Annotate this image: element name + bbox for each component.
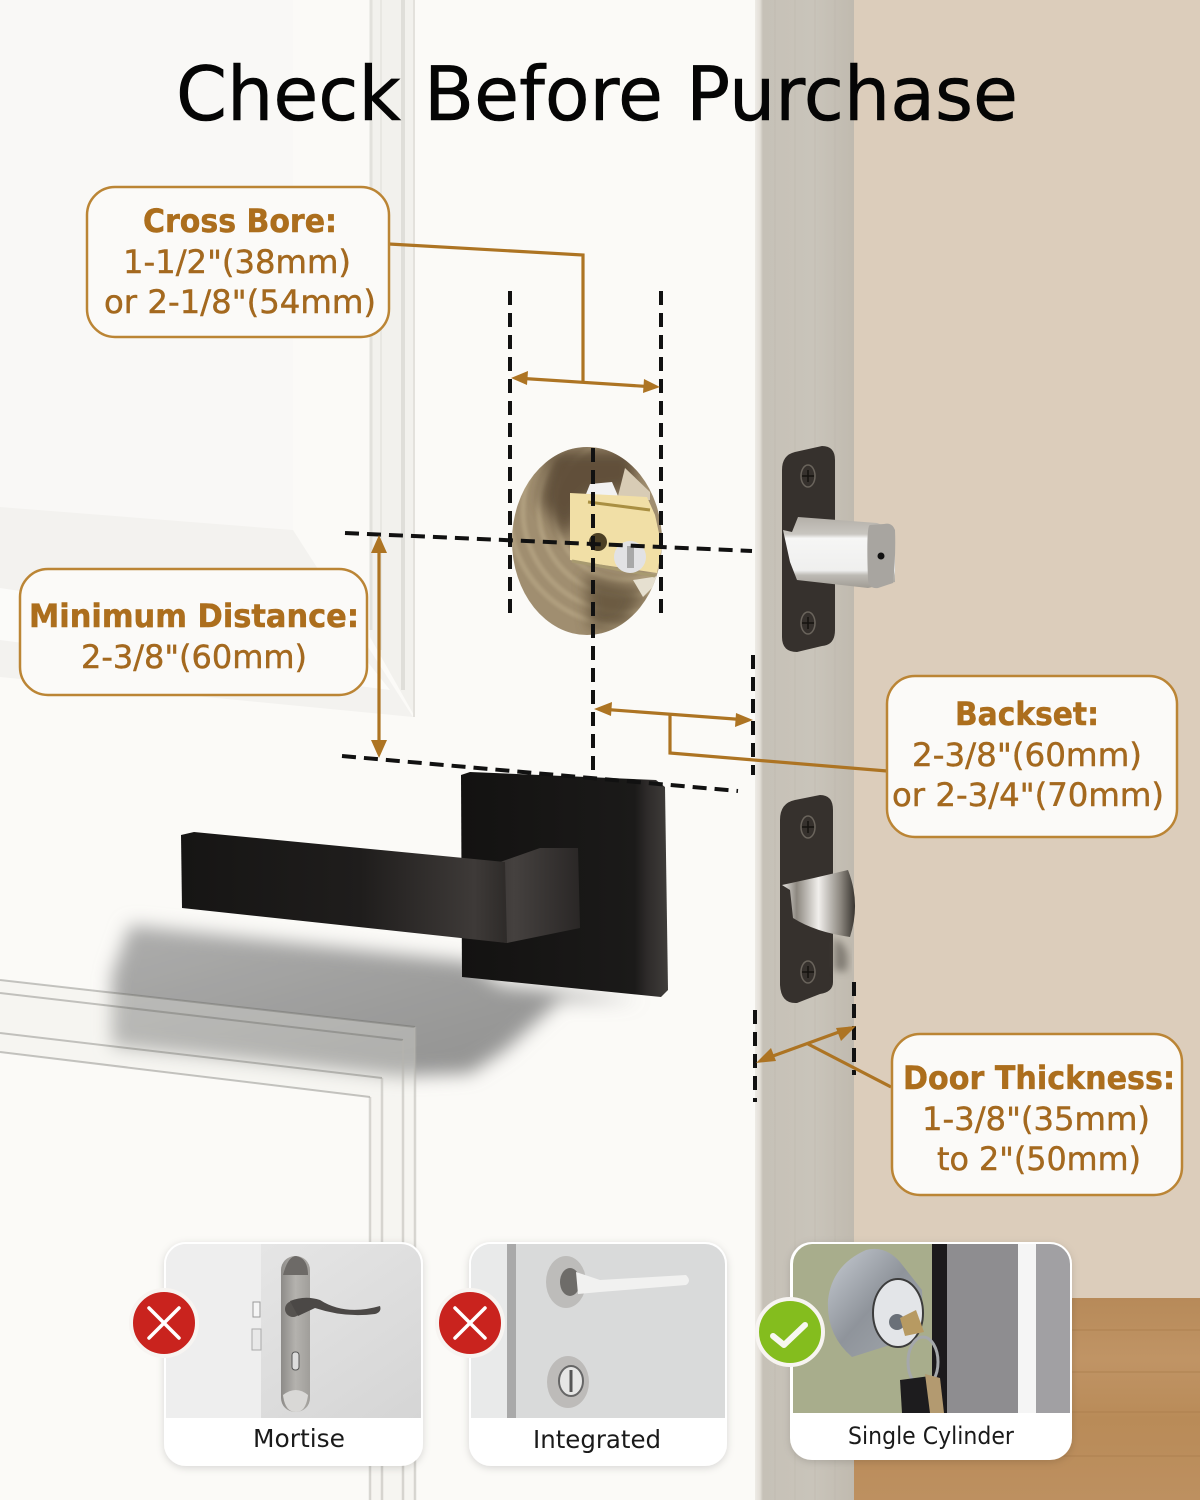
square rose plate xyxy=(461,772,668,997)
single cylinder photo xyxy=(793,1244,1070,1413)
door thickness arrow and leader xyxy=(756,1026,891,1087)
single cylinder label: Single Cylinder xyxy=(848,1422,1014,1450)
rounded latch bolt xyxy=(782,870,855,937)
callout: backset xyxy=(887,676,1177,837)
integrated photo xyxy=(471,1244,725,1418)
bored hole with latch xyxy=(512,447,662,635)
badge: suitable single cylinder xyxy=(757,1299,823,1365)
callout: backset: Backset: xyxy=(955,695,1099,733)
upper door panel xyxy=(0,0,293,530)
callout: minimum distance: 2-3/8"(60mm) xyxy=(81,638,307,676)
bevel highlight xyxy=(0,588,390,690)
square bolt xyxy=(783,517,895,588)
bolt strike plate and deadlatch xyxy=(782,446,895,652)
minimum distance arrow xyxy=(371,535,387,758)
callout: cross bore xyxy=(87,187,389,337)
cross bore arrow and leader xyxy=(389,244,660,393)
card: mortise xyxy=(164,1242,423,1466)
callout: cross bore: Cross Bore: xyxy=(143,202,337,240)
title: Check Before Purchase xyxy=(176,50,1018,138)
lower door moulding xyxy=(0,980,415,1500)
callout: backset: 2-3/8"(60mm) xyxy=(912,736,1142,774)
plate screws xyxy=(801,465,815,634)
card: integrated xyxy=(469,1242,727,1466)
mortise label: Mortise xyxy=(253,1424,345,1453)
lever handle xyxy=(181,832,580,943)
wall background xyxy=(850,0,1200,1500)
lower strike plate and latch xyxy=(780,795,855,1003)
badge: not suitable integrated xyxy=(437,1290,503,1356)
callout: cross bore: or 2-1/8"(54mm) xyxy=(104,283,376,321)
vertical moulding upper xyxy=(370,0,415,717)
callout: door thickness: Door Thickness: xyxy=(903,1059,1175,1097)
callout: minimum distance: Minimum Distance: xyxy=(29,597,359,635)
door edge xyxy=(755,0,854,1500)
callout: door thickness: to 2"(50mm) xyxy=(937,1140,1141,1178)
dashed guide lines xyxy=(342,291,854,1102)
door panel bevel xyxy=(0,507,413,717)
mortise photo xyxy=(166,1244,421,1418)
handle shadow on door xyxy=(112,925,640,1076)
card: single cylinder xyxy=(790,1242,1072,1460)
callout: door thickness: 1-3/8"(35mm) xyxy=(922,1100,1150,1138)
callout: minimum distance xyxy=(20,569,367,695)
wood floor xyxy=(850,1298,1200,1500)
callout: cross bore: 1-1/2"(38mm) xyxy=(123,243,351,281)
integrated label: Integrated xyxy=(533,1425,661,1454)
callout: backset: or 2-3/4"(70mm) xyxy=(892,776,1164,814)
door face xyxy=(0,0,756,1500)
callout: door thickness xyxy=(892,1034,1182,1195)
badge: not suitable mortise xyxy=(131,1290,197,1356)
backset arrow and leader xyxy=(594,702,887,771)
